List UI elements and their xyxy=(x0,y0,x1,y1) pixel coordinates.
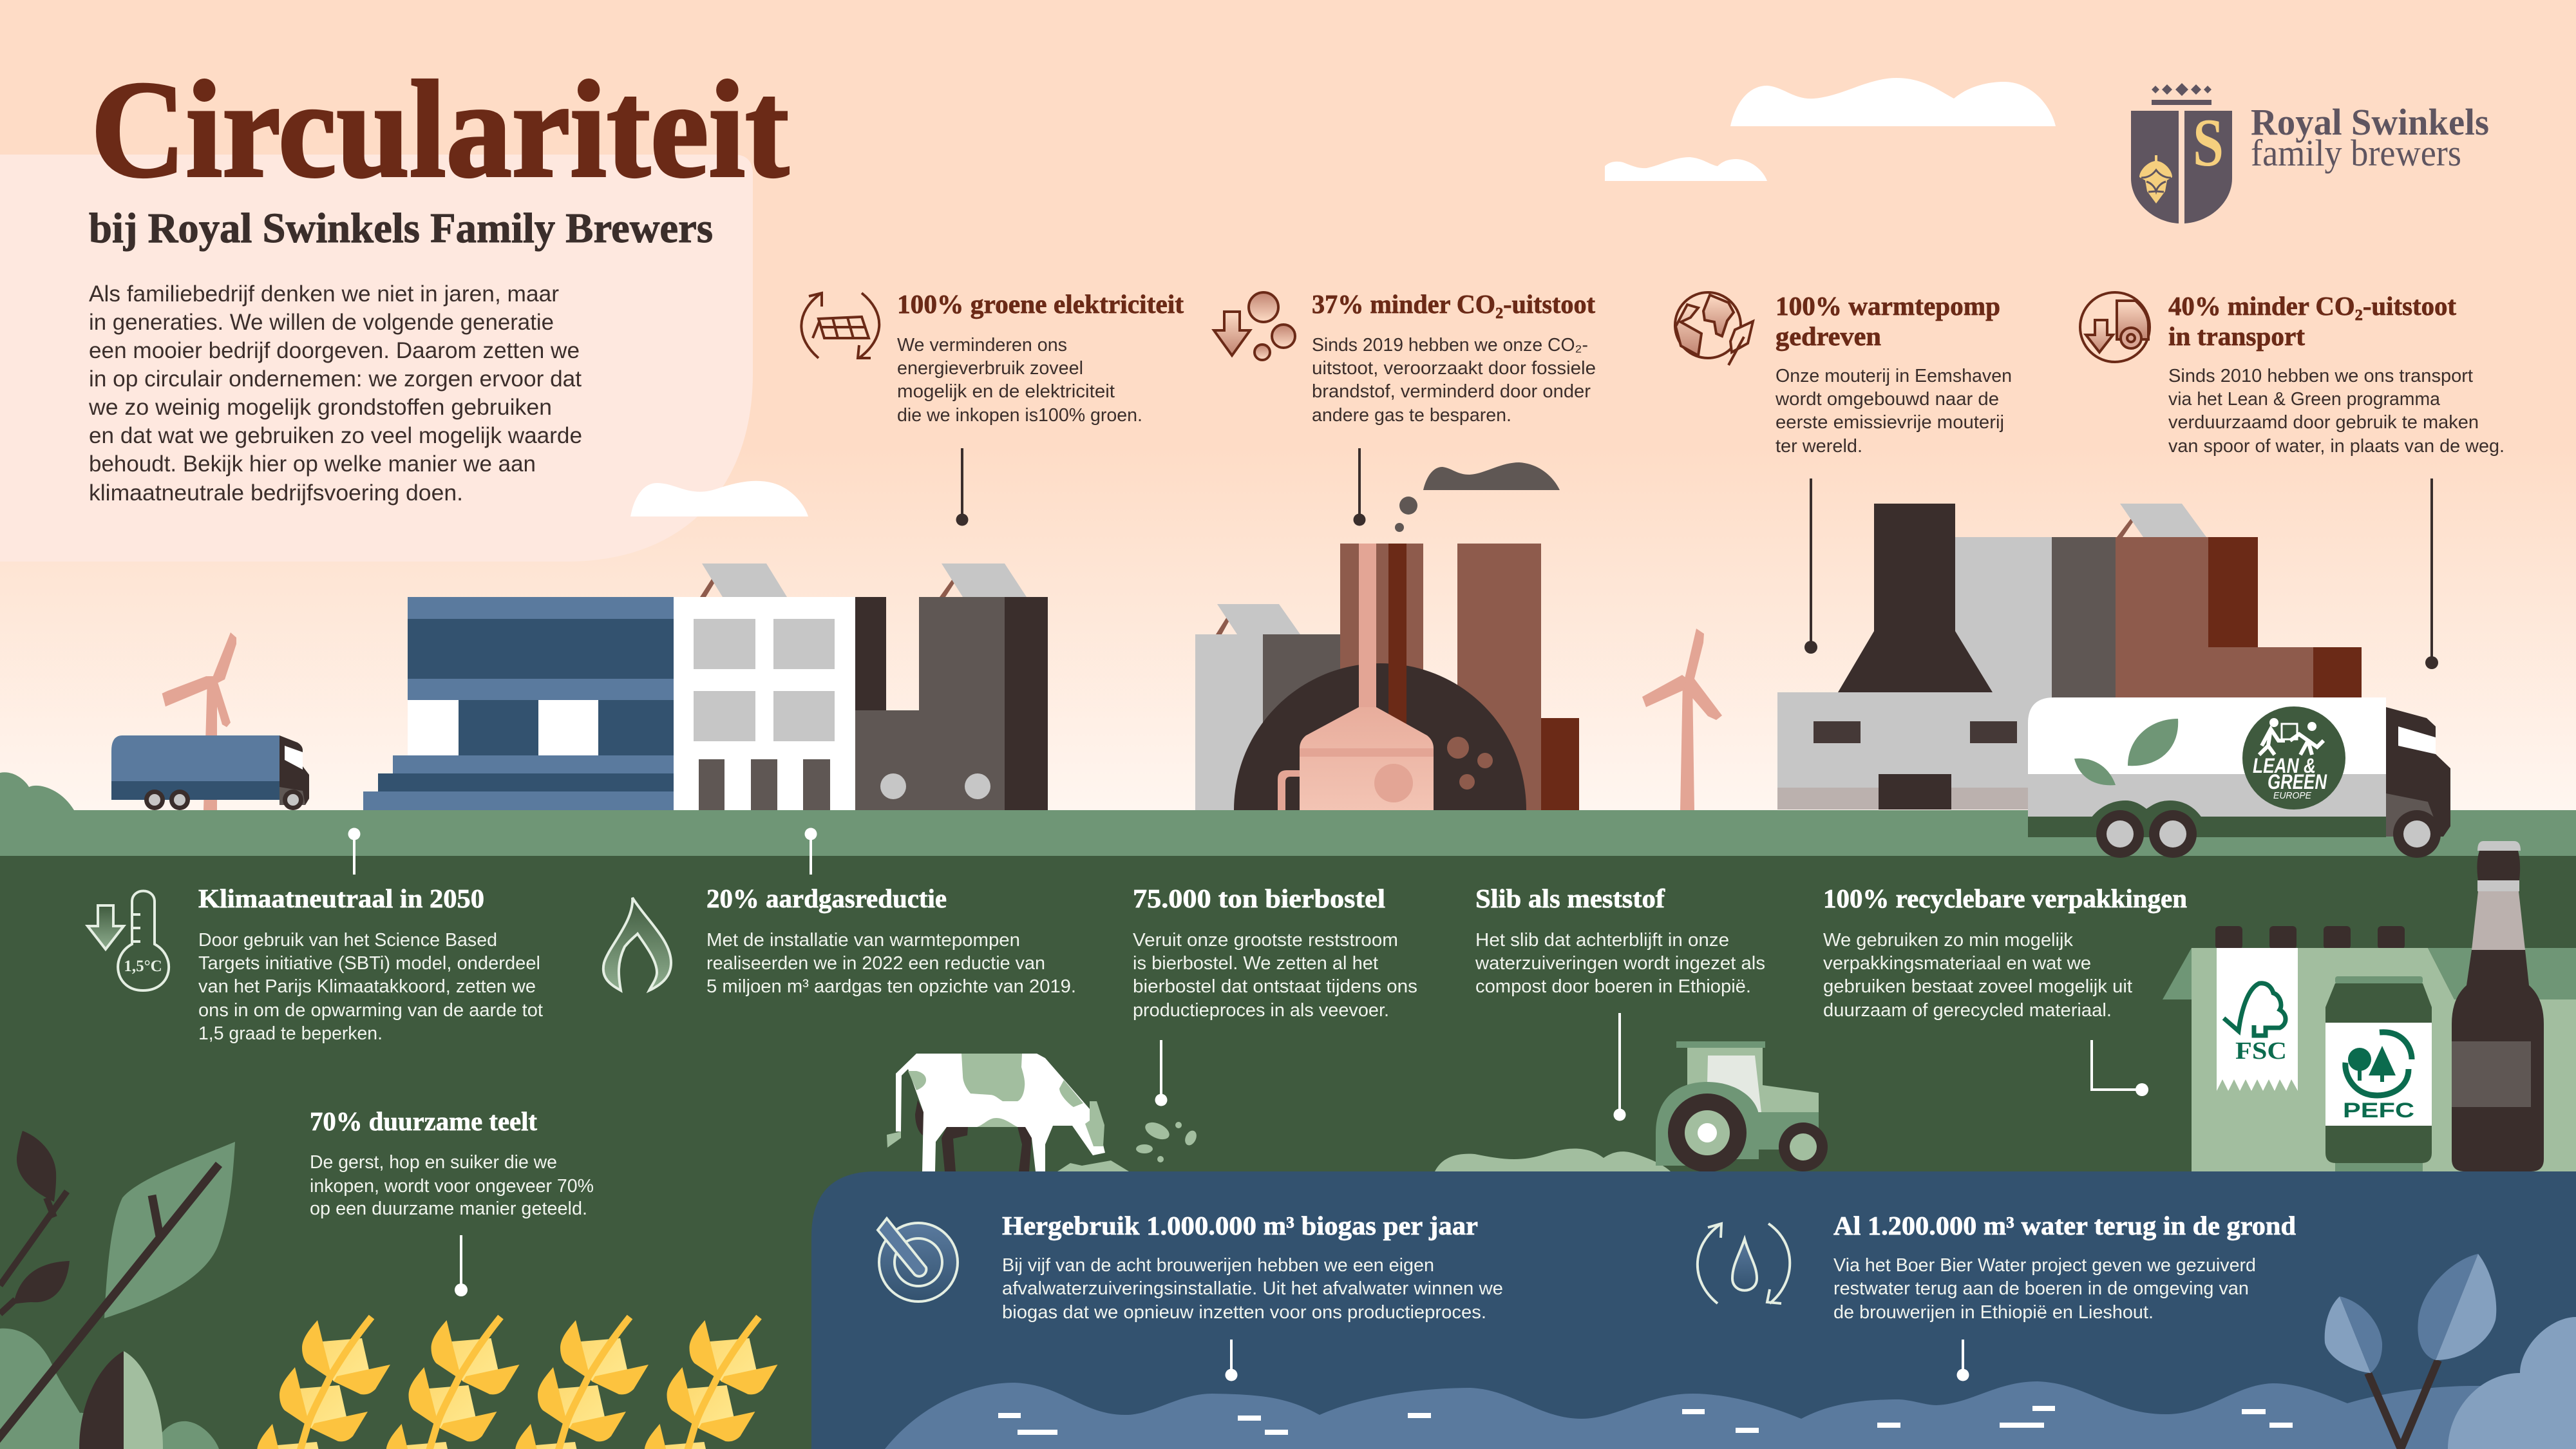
icon: arrow and bubbles xyxy=(1214,292,1295,360)
badge: Lean and Green xyxy=(2242,706,2345,810)
leader: biogas xyxy=(1225,1340,1238,1381)
block: 40% minder CO2-uitstoot in transport: 40% minder CO₂-uitstoot xyxy=(2168,291,2456,321)
badge: Lean and Green: EUROPE xyxy=(2273,790,2312,801)
block: Klimaatneutraal in 2050: Targets initiative (SBTi) model, onderdeel xyxy=(198,953,540,974)
block: 100% groene elektriciteit: 100% groene elektriciteit xyxy=(897,289,1184,319)
ground strip xyxy=(0,810,2576,856)
block: 20% aardgasreductie: 20% aardgasreductie xyxy=(706,884,947,913)
icon: thermometer with arrow xyxy=(88,891,169,990)
FSC label xyxy=(2217,948,2298,1091)
block: 100% warmtepomp gedreven: gedreven xyxy=(1776,321,1881,351)
block: 75.000 ton bierbostel: is bierbostel. We zetten al het xyxy=(1133,953,1378,974)
compost pile xyxy=(1435,1148,1671,1171)
truck: Lean and Green xyxy=(2028,697,2450,858)
block: 100% warmtepomp gedreven xyxy=(1675,291,2012,457)
block: Hergebruik biogas: Hergebruik 1.000.000 m³ biogas per jaar xyxy=(1002,1211,1478,1240)
block: 40% minder CO2-uitstoot in transport: Sinds 2010 hebben we ons transport xyxy=(2168,366,2473,386)
leader: klimaatneutraal xyxy=(348,828,361,875)
block: 20% aardgasreductie: realiseerden we in 2022 een reductie van xyxy=(706,953,1045,974)
block: Hergebruik biogas: biogas dat we opnieuw inzetten voor ons productieproces. xyxy=(1002,1302,1486,1323)
dark green field xyxy=(0,856,2576,1449)
leaf: small xyxy=(2074,759,2116,785)
block: 100% warmtepomp gedreven: wordt omgebouwd naar de xyxy=(1775,389,1999,410)
leader: CO2 brewery xyxy=(1354,448,1365,526)
block: 100% warmtepomp gedreven: 100% warmtepomp xyxy=(1776,291,2000,321)
block: 100% warmtepomp gedreven: Onze mouterij in Eemshaven xyxy=(1776,366,2012,386)
logo: Royal Swinkels family brewers: family brewers xyxy=(2251,132,2461,174)
block: Slib als meststof: Het slib dat achterblijft in onze xyxy=(1475,930,1729,951)
building: brewery with kettle xyxy=(1195,544,1579,810)
hill left xyxy=(0,772,74,810)
icon: solar panel with cycle arrows xyxy=(801,293,879,358)
block: 37% minder CO2-uitstoot xyxy=(1214,289,1596,426)
block: 37% minder CO2-uitstoot: andere gas te besparen. xyxy=(1312,405,1511,426)
icon: flame xyxy=(603,898,671,990)
icon: thermometer with arrow: 1,5°C xyxy=(124,958,162,975)
block: 40% minder CO2-uitstoot in transport: in transport xyxy=(2168,321,2305,351)
intro text: en dat wat we gebruiken zo veel mogelijk waarde xyxy=(89,423,582,448)
block: 75.000 ton bierbostel: 75.000 ton bierbostel xyxy=(1133,884,1385,913)
leader: teelt xyxy=(455,1235,468,1296)
block: 100% groene elektriciteit: mogelijk en de elektriciteit xyxy=(897,381,1115,402)
can with PEFC label xyxy=(2325,976,2432,1171)
block: 37% minder CO2-uitstoot: uitstoot, veroorzaakt door fossiele xyxy=(1312,358,1596,379)
building: blue office xyxy=(363,597,674,810)
block: water terug in de grond: restwater terug aan de boeren in de omgeving van xyxy=(1833,1278,2249,1299)
block: water terug in de grond: Via het Boer Bier Water project geven we gezuiverd xyxy=(1833,1255,2256,1276)
smoke xyxy=(1395,462,1560,532)
block: 100% recyclebare verpakkingen: We gebruiken zo min mogelijk xyxy=(1823,930,2073,951)
block: 100% groene elektriciteit xyxy=(801,289,1184,426)
panel: water and biogas xyxy=(811,1171,2576,1449)
block: 75.000 ton bierbostel: productieproces in als veevoer. xyxy=(1133,1000,1389,1021)
block: 70% duurzame teelt: De gerst, hop en suiker die we xyxy=(310,1152,557,1173)
intro panel background xyxy=(0,155,753,562)
grass pile and food bits xyxy=(1057,1119,1198,1171)
bottle xyxy=(2452,841,2544,1171)
sky background xyxy=(0,0,2576,810)
intro text: in generaties. We willen de volgende generatie xyxy=(89,310,554,335)
intro text: we zo weinig mogelijk grondstoffen gebruiken xyxy=(88,395,552,420)
block: water terug in de grond: Al 1.200.000 m³ water terug in de grond xyxy=(1833,1211,2296,1240)
logo: Royal Swinkels family brewers xyxy=(2131,83,2489,223)
block: Klimaatneutraal in 2050: Klimaatneutraal in 2050 xyxy=(198,884,484,913)
plants: leaves bottom left xyxy=(0,1131,235,1449)
block: Slib als meststof: Slib als meststof xyxy=(1475,884,1665,913)
intro text: Als familiebedrijf denken we niet in jaren, maar xyxy=(89,281,559,307)
cow xyxy=(887,1054,1105,1171)
block: 20% aardgasreductie: Met de installatie van warmtepompen xyxy=(706,930,1020,951)
block: Slib als meststof: compost door boeren in Ethiopië. xyxy=(1475,976,1751,997)
block: 20% aardgasreductie: 5 miljoen m³ aardgas ten opzichte van 2019. xyxy=(706,976,1076,997)
cloud: near intro panel xyxy=(630,481,808,516)
block: water terug in de grond: de brouwerijen in Ethiopië en Lieshout. xyxy=(1833,1302,2154,1323)
block: Klimaatneutraal in 2050: 1,5 graad te beperken. xyxy=(198,1023,383,1044)
leader: aardgasreductie xyxy=(805,828,817,875)
cloud: large top right xyxy=(1730,78,2056,126)
block: 37% minder CO2-uitstoot: Sinds 2019 hebben we onze CO₂- xyxy=(1312,335,1588,355)
leader: bierbostel xyxy=(1155,1040,1167,1106)
plants: blue leaves bottom right xyxy=(2325,1254,2576,1449)
block: 40% minder CO2-uitstoot in transport: verduurzaamd door gebruik te maken xyxy=(2168,412,2479,433)
block: 70% duurzame teelt xyxy=(310,1106,594,1219)
block: 40% minder CO2-uitstoot in transport: van spoor of water, in plaats van de weg. xyxy=(2168,436,2505,457)
block: Hergebruik biogas xyxy=(878,1211,1503,1323)
block: 70% duurzame teelt: inkopen, wordt voor ongeveer 70% xyxy=(310,1176,594,1197)
icon: biogas valve xyxy=(878,1218,958,1302)
block: 100% recyclebare verpakkingen xyxy=(1823,884,2187,1021)
block: Hergebruik biogas: Bij vijf van de acht brouwerijen hebben we een eigen xyxy=(1002,1255,1434,1276)
block: 100% warmtepomp gedreven: eerste emissievrije mouterij xyxy=(1776,412,2004,433)
block: 100% recyclebare verpakkingen: duurzaam of gerecycled materiaal. xyxy=(1823,1000,2112,1021)
icon: globe with leaf xyxy=(1675,292,1753,365)
leader: transport xyxy=(2425,478,2438,669)
block: Klimaatneutraal in 2050 xyxy=(88,884,543,1044)
leaf: large xyxy=(2128,719,2178,766)
leader: verpakkingen xyxy=(2092,1040,2148,1096)
block: Hergebruik biogas: afvalwaterzuiveringsinstallatie. Uit het afvalwater winnen we xyxy=(1002,1278,1503,1299)
block: 40% minder CO2-uitstoot in transport xyxy=(2080,291,2505,457)
tractor xyxy=(1656,1041,1828,1172)
wind turbine: left xyxy=(160,632,236,810)
icon: truck in circle xyxy=(2080,292,2150,362)
subtitle: bij Royal Swinkels Family Brewers xyxy=(89,205,713,252)
block: Klimaatneutraal in 2050: Door gebruik van het Science Based xyxy=(198,930,497,951)
block: 100% groene elektriciteit: We verminderen ons xyxy=(897,335,1067,355)
logo: Royal Swinkels family brewers: S xyxy=(2193,105,2224,180)
block: Klimaatneutraal in 2050: van het Parijs Klimaatakkoord, zetten we xyxy=(198,976,536,997)
cloud: small top right xyxy=(1605,157,1767,181)
wheat field xyxy=(257,1317,778,1449)
block: 37% minder CO2-uitstoot: brandstof, verminderd door onder xyxy=(1312,381,1591,402)
block: 75.000 ton bierbostel xyxy=(1133,884,1417,1021)
block: 20% aardgasreductie xyxy=(603,884,1076,997)
block: water terug in de grond xyxy=(1698,1211,2296,1323)
title: Circulariteit xyxy=(91,52,789,206)
block: 37% minder CO2-uitstoot: 37% minder CO₂-uitstoot xyxy=(1312,289,1595,319)
leader: water xyxy=(1956,1340,1969,1381)
block: 75.000 ton bierbostel: bierbostel dat ontstaat tijdens ons xyxy=(1133,976,1417,997)
intro text: in op circulair ondernemen: we zorgen ervoor dat xyxy=(89,366,582,392)
packaging: box, can and bottle xyxy=(2163,841,2576,1171)
block: 100% groene elektriciteit: die we inkopen is100% groen. xyxy=(897,405,1142,426)
building: malting with chimney xyxy=(1777,504,2362,810)
icon: water drop with cycle arrows xyxy=(1698,1224,1790,1303)
FSC label: FSC xyxy=(2235,1037,2287,1065)
badge: Lean and Green: LEAN & xyxy=(2253,754,2316,777)
building: white with windows xyxy=(674,564,855,810)
block: 100% groene elektriciteit: energieverbruik zoveel xyxy=(897,358,1083,379)
leader: mouterij xyxy=(1804,478,1817,654)
wind turbine: right xyxy=(1642,629,1722,810)
badge: Lean and Green: GREEN xyxy=(2268,770,2327,793)
can with PEFC label: PEFC xyxy=(2343,1099,2414,1122)
intro text: behoudt. Bekijk hier op welke manier we aan xyxy=(89,451,536,477)
block: 100% recyclebare verpakkingen: 100% recyclebare verpakkingen xyxy=(1823,884,2187,913)
intro text xyxy=(88,281,582,506)
intro text: een mooier bedrijf doorgeven. Daarom zetten we xyxy=(89,338,580,363)
building: dark factory xyxy=(855,564,1048,810)
block: Klimaatneutraal in 2050: ons in om de opwarming van de aarde tot xyxy=(198,1000,543,1021)
block: 70% duurzame teelt: op een duurzame manier geteeld. xyxy=(310,1198,587,1219)
truck: blue small xyxy=(111,735,309,810)
block: Slib als meststof xyxy=(1475,884,1765,997)
water waves xyxy=(885,1381,2576,1449)
block: 75.000 ton bierbostel: Veruit onze grootste reststroom xyxy=(1133,930,1398,951)
leader: slib xyxy=(1614,1013,1625,1121)
water highlights xyxy=(998,1406,2293,1435)
block: 100% recyclebare verpakkingen: gebruiken bestaat zoveel mogelijk uit xyxy=(1823,976,2132,997)
block: 100% recyclebare verpakkingen: verpakkingsmateriaal en wat we xyxy=(1823,953,2091,974)
block: Slib als meststof: waterzuiveringen wordt ingezet als xyxy=(1475,953,1765,974)
logo: Royal Swinkels family brewers: Royal Swinkels xyxy=(2251,101,2489,143)
block: 40% minder CO2-uitstoot in transport: via het Lean & Green programma xyxy=(2168,389,2441,410)
leader: groene elektriciteit xyxy=(956,448,969,526)
block: 70% duurzame teelt: 70% duurzame teelt xyxy=(310,1106,537,1136)
intro text: klimaatneutrale bedrijfsvoering doen. xyxy=(89,480,463,506)
block: 100% warmtepomp gedreven: ter wereld. xyxy=(1776,436,1862,457)
